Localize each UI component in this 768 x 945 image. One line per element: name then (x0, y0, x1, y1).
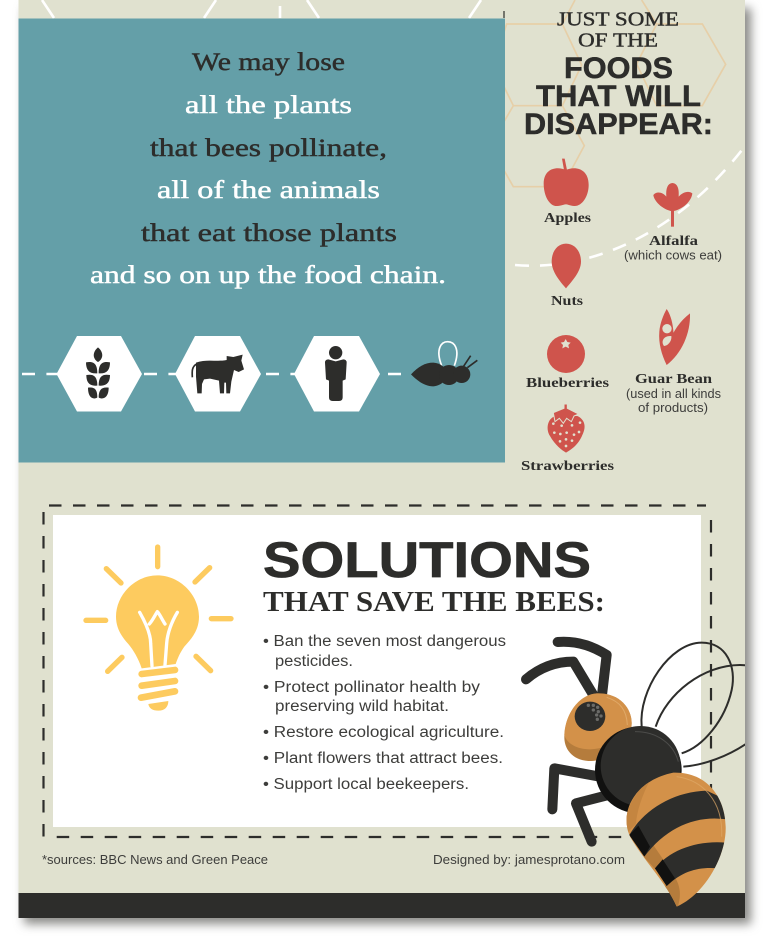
solutions list: • Restore ecological agriculture. (263, 724, 504, 741)
quote text: all the plants (185, 92, 352, 119)
heading: foods that will disappear: OF THE (578, 30, 658, 52)
background honeycomb lines (42, 0, 481, 18)
food: strawberries (521, 404, 614, 473)
quote text (90, 49, 446, 289)
solutions list: • Support local beekeepers. (263, 776, 469, 793)
food: alfalfa: (which cows eat) (624, 248, 722, 262)
heading: foods that will disappear: THAT WILL (536, 80, 701, 113)
food: alfalfa (624, 183, 722, 262)
solutions list: • Protect pollinator health by (263, 679, 480, 696)
solutions list: preserving wild habitat. (275, 698, 449, 715)
quote text: and so on up the food chain. (90, 262, 446, 289)
food: alfalfa: Alfalfa (649, 233, 698, 248)
bee antennae (526, 642, 607, 695)
illustration: bee (526, 642, 768, 913)
heading: solutions: THAT SAVE THE BEES: (263, 587, 605, 618)
icon: wheat hexagon (56, 336, 142, 412)
heading: foods that will disappear: DISAPPEAR: (524, 108, 713, 141)
food chain dashed line (22, 373, 412, 375)
quote text: all of the animals (157, 177, 380, 204)
bee head (564, 693, 632, 761)
food: apples (544, 159, 591, 225)
panel: food chain (18, 18, 505, 462)
solutions list: • Ban the seven most dangerous (263, 633, 506, 650)
food: nuts: Nuts (551, 293, 583, 308)
footer: sources: *sources: BBC News and Green Peace (42, 852, 268, 867)
food: strawberries: Strawberries (521, 458, 614, 473)
footer: designer credit: Designed by: jamesprotano.com (433, 852, 625, 867)
solutions list: pesticides. (275, 653, 353, 670)
food: blueberries (526, 335, 609, 390)
heading: solutions (263, 532, 605, 618)
dashed border (44, 506, 711, 838)
food: apples: Apples (544, 210, 591, 225)
food: guar bean: of products) (638, 401, 708, 415)
food: guar bean: Guar Bean (635, 371, 713, 386)
icon: light bulb (86, 547, 231, 711)
icon: person hexagon (294, 336, 380, 412)
bee thorax (595, 727, 682, 813)
icon: cow hexagon (175, 336, 261, 412)
solutions list (263, 633, 506, 793)
footer bar (18, 893, 745, 918)
panel: solutions (44, 506, 711, 838)
heading: solutions: SOLUTIONS (263, 532, 591, 588)
bee legs (552, 768, 608, 842)
quote text: that bees pollinate, (150, 135, 387, 162)
background hexagon outlines (490, 0, 726, 187)
heading: foods that will disappear (524, 8, 713, 141)
heading: foods that will disappear: JUST SOME (557, 8, 679, 30)
dashed flight path (515, 146, 745, 266)
solutions list: • Plant flowers that attract bees. (263, 750, 503, 767)
quote text: that eat those plants (141, 220, 397, 247)
bee wings (640, 642, 745, 768)
icon: bee silhouette (411, 342, 477, 386)
quote text: We may lose (192, 49, 345, 76)
food: guar bean: (used in all kinds (626, 387, 721, 401)
food: nuts (551, 244, 583, 308)
food: guar bean (626, 309, 721, 415)
food: blueberries: Blueberries (526, 375, 609, 390)
bee abdomen (626, 772, 726, 906)
heading: foods that will disappear: FOODS (564, 52, 673, 85)
